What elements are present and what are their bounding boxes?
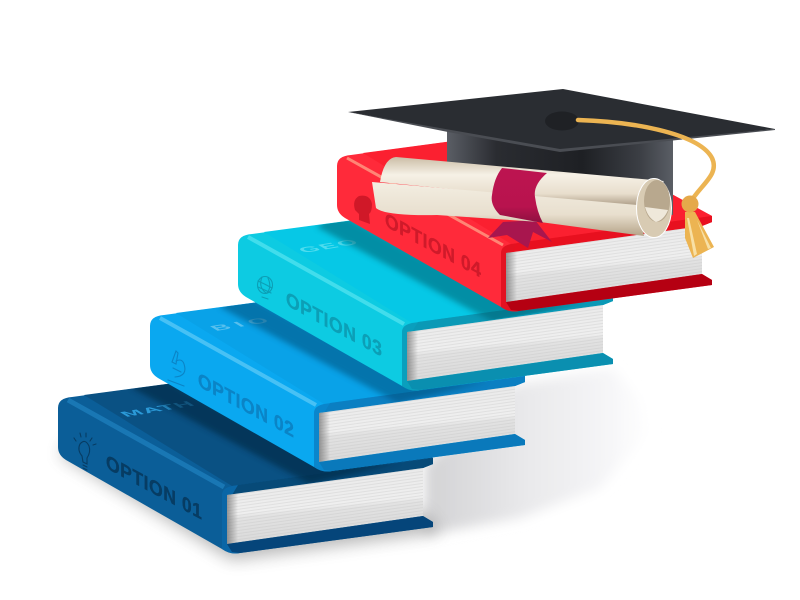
top label: GEO [295, 238, 365, 255]
tassel [578, 120, 714, 258]
spine title: OPTION 02 [198, 369, 294, 443]
page block [227, 468, 423, 544]
cover and spine [58, 370, 433, 554]
lower sheet [372, 182, 644, 236]
top cover strip [222, 458, 433, 554]
spine ridge highlight [347, 158, 503, 245]
page block [506, 226, 702, 302]
shadow of book 2 on book 1 [132, 384, 392, 484]
top cover strip [402, 295, 613, 390]
top face [363, 128, 712, 244]
top face [84, 370, 433, 486]
top cover strip [501, 216, 712, 312]
top cover strip [314, 376, 525, 472]
top label: MATH [117, 400, 200, 419]
diploma scroll [372, 157, 672, 248]
spine ridge highlight [68, 400, 224, 487]
spine title: OPTION 04 [385, 209, 482, 283]
bottom cover strip [506, 274, 712, 311]
tassel strands [685, 212, 714, 258]
backdrop shadow to the right of the stack [60, 368, 648, 560]
spine ridge highlight [160, 318, 316, 405]
tassel cord [578, 120, 714, 203]
icon: light bulb [74, 433, 96, 470]
cap board underside [348, 112, 775, 152]
crimson ribbon band [492, 168, 547, 223]
cover and spine [337, 128, 712, 312]
icon: globe [258, 276, 272, 299]
scroll inner sheet [645, 207, 668, 222]
tassel highlight [687, 218, 711, 256]
bottom cover strip [407, 353, 613, 390]
page block [319, 386, 515, 462]
book: option 04 [337, 128, 712, 312]
cap skull [447, 128, 673, 215]
spine title: OPTION 03 [286, 288, 382, 362]
icon: head with gears [354, 196, 372, 224]
cap button [545, 112, 579, 130]
bottom cover strip [227, 516, 433, 553]
tassel knot [682, 196, 698, 212]
scroll end [636, 178, 672, 238]
spine ridge highlight [248, 237, 404, 324]
red ribbon tails [488, 220, 552, 248]
upper roll [380, 157, 664, 208]
scroll inner spiral [644, 180, 670, 222]
shadow of book 4 on book 3 [316, 220, 575, 320]
cover and spine [238, 207, 613, 390]
shadow of book 3 on book 2 [219, 302, 480, 402]
cap board [348, 89, 775, 149]
spine title: OPTION 01 [106, 451, 202, 525]
book: option 02 [150, 288, 525, 472]
page block [407, 305, 603, 381]
cover and spine [150, 288, 525, 472]
top face [176, 288, 525, 404]
graduation cap [348, 89, 775, 215]
book: option 01 [58, 370, 433, 554]
bottom cover strip [319, 434, 525, 471]
icon: microscope [168, 351, 185, 386]
top label: BIO [207, 315, 280, 333]
top face [264, 207, 613, 323]
infographic: stack of four option books with cap and diploma [56, 89, 775, 568]
book: option 03 [238, 207, 613, 390]
